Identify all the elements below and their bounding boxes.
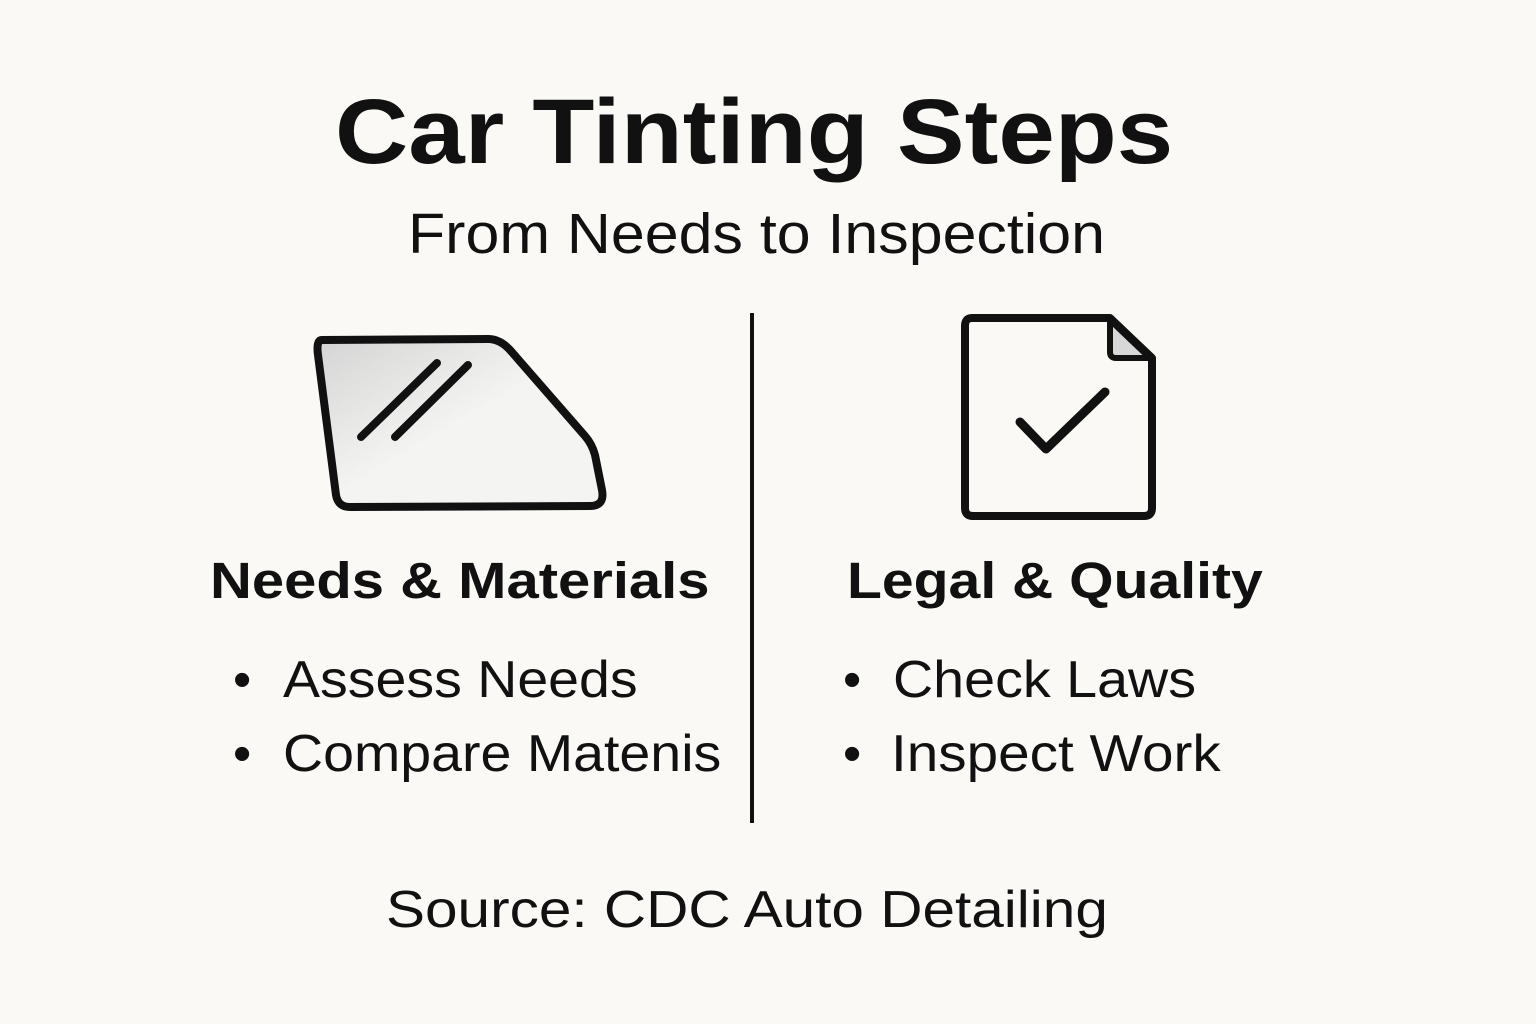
source: Source: CDC Auto Detailing: [386, 881, 1108, 939]
list: right: [843, 651, 1221, 783]
list: left: •: [233, 651, 251, 709]
subtitle: From Needs to Inspection: [408, 202, 1105, 266]
list: left: •: [233, 725, 251, 783]
list: left: Assess Needs: [283, 651, 638, 709]
title: Car Tinting Steps: [335, 81, 1173, 183]
divider: [750, 313, 754, 823]
list: left: Compare Matenis: [283, 725, 721, 783]
heading: Legal & Quality: Legal & Quality: [847, 552, 1263, 609]
list: right: •: [843, 651, 861, 709]
list: right: •: [843, 725, 861, 783]
list: right: Inspect Work: [891, 725, 1221, 783]
icon: car window: [314, 335, 606, 511]
list: left: [233, 651, 721, 783]
heading: Needs & Materials: Needs & Materials: [210, 552, 710, 609]
icon: document with check: [961, 314, 1156, 520]
list: right: Check Laws: [893, 651, 1196, 709]
